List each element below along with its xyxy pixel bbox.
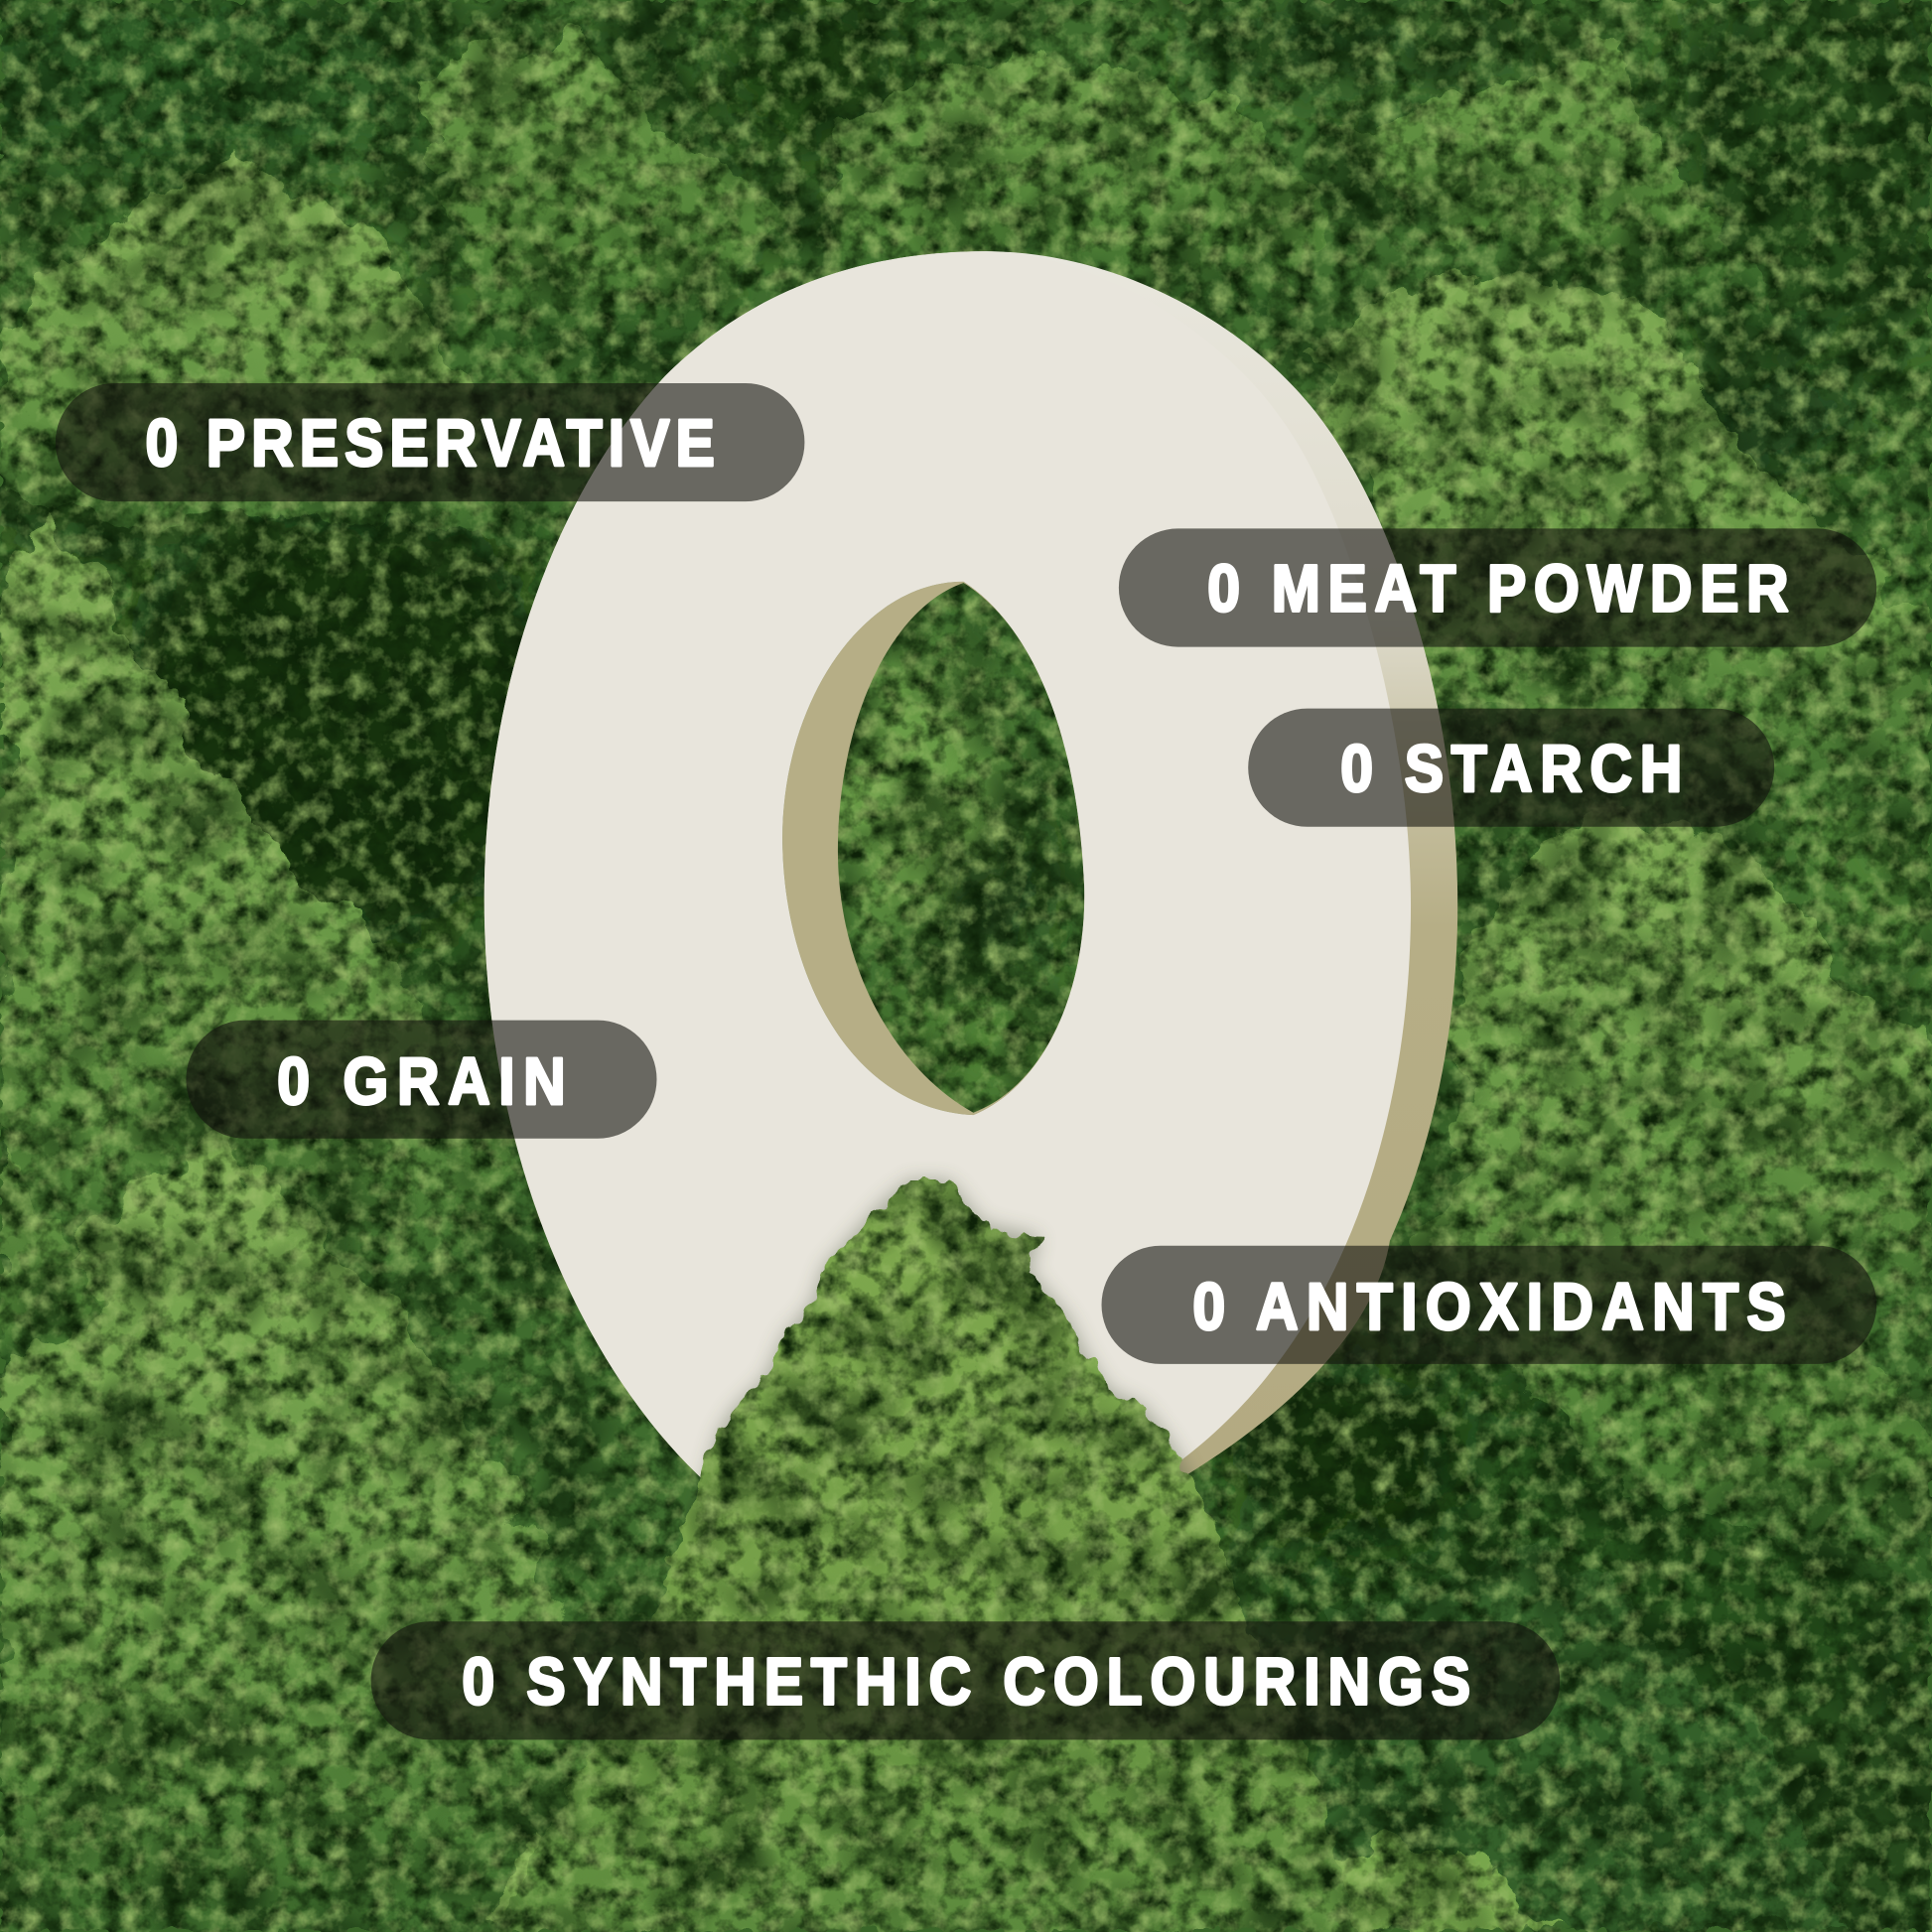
pill: 0 grain: 0 GRAIN [277,1045,566,1119]
pill: 0 starch: 0 STARCH [1340,732,1682,806]
pill: 0 preservative: 0 PRESERVATIVE [145,407,715,481]
pill: 0 synthethic colourings [371,1621,1560,1739]
zero: inner hole wall [782,582,1084,1115]
pill: 0 synthethic colourings: 0 SYNTHETHIC COLOURINGS [462,1645,1470,1719]
pill: 0 grain [186,1021,656,1139]
foreground tree [492,1180,1355,1932]
tree overlapping the zero: shadow [690,1180,1217,1528]
pill: 0 meat powder: 0 MEAT POWDER [1207,552,1789,625]
zero: side edge [484,251,1457,1484]
pill: 0 preservative [56,383,804,501]
zero: front face [484,251,1411,1484]
pill: 0 antioxidants: 0 ANTIOXIDANTS [1192,1271,1786,1344]
big number zero [484,251,1457,1484]
pill: 0 antioxidants [1102,1246,1876,1364]
pill: 0 meat powder [1119,528,1876,647]
pill: 0 starch [1248,709,1774,827]
